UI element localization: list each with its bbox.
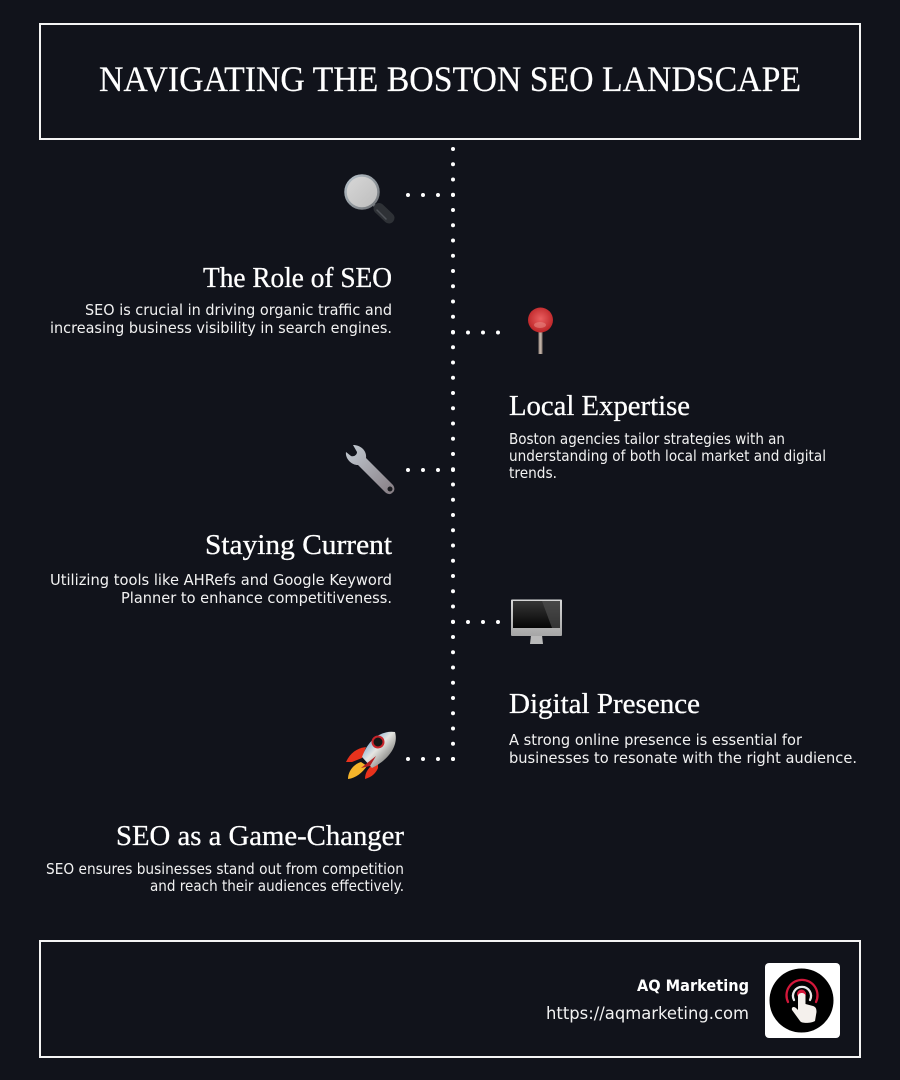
panel: staying current bbox=[50, 529, 392, 607]
text block: SEO ensures businesses stand out from competition bbox=[46, 860, 404, 878]
panel: SEO as a game-changer bbox=[46, 820, 404, 895]
text block: and reach their audiences effectively. bbox=[150, 877, 404, 895]
icon: magnifying glass bbox=[346, 176, 389, 219]
text block bbox=[50, 301, 392, 337]
text block: understanding of both local market and digital bbox=[509, 447, 826, 465]
timeline dotted spine bbox=[408, 149, 499, 760]
text block bbox=[509, 430, 826, 482]
icon: rocket bbox=[346, 732, 396, 779]
text block: Boston agencies tailor strategies with an bbox=[509, 430, 785, 448]
panel: the role of SEO bbox=[50, 262, 392, 337]
title box bbox=[40, 24, 860, 139]
website url: https://aqmarketing.com bbox=[546, 1004, 749, 1023]
text block: increasing business visibility in search engines. bbox=[50, 319, 392, 337]
panel: local expertise bbox=[509, 390, 826, 482]
text block bbox=[46, 860, 404, 895]
heading: Local Expertise bbox=[509, 390, 690, 422]
heading: Staying Current bbox=[205, 529, 392, 561]
text block: Planner to enhance competitiveness. bbox=[121, 589, 392, 607]
icon: wrench bbox=[346, 445, 394, 494]
footer box bbox=[40, 941, 860, 1057]
icon: AQ Marketing logo bbox=[765, 963, 840, 1038]
text block: SEO is crucial in driving organic traffic and bbox=[85, 301, 392, 319]
icon: round pushpin bbox=[528, 308, 553, 354]
text block bbox=[50, 571, 392, 607]
text block bbox=[509, 731, 857, 767]
text block: A strong online presence is essential for bbox=[509, 731, 803, 749]
panel: digital presence bbox=[509, 688, 857, 767]
text block: Utilizing tools like AHRefs and Google Keyword bbox=[50, 571, 392, 589]
heading: Digital Presence bbox=[509, 688, 700, 720]
brand name: AQ Marketing bbox=[637, 976, 749, 995]
heading: The Role of SEO bbox=[203, 262, 392, 294]
title: NAVIGATING THE BOSTON SEO LANDSCAPE bbox=[99, 59, 801, 99]
text block: trends. bbox=[509, 464, 557, 482]
text block: businesses to resonate with the right audience. bbox=[509, 749, 857, 767]
icon: desktop computer bbox=[511, 600, 562, 644]
heading: SEO as a Game-Changer bbox=[116, 820, 404, 852]
